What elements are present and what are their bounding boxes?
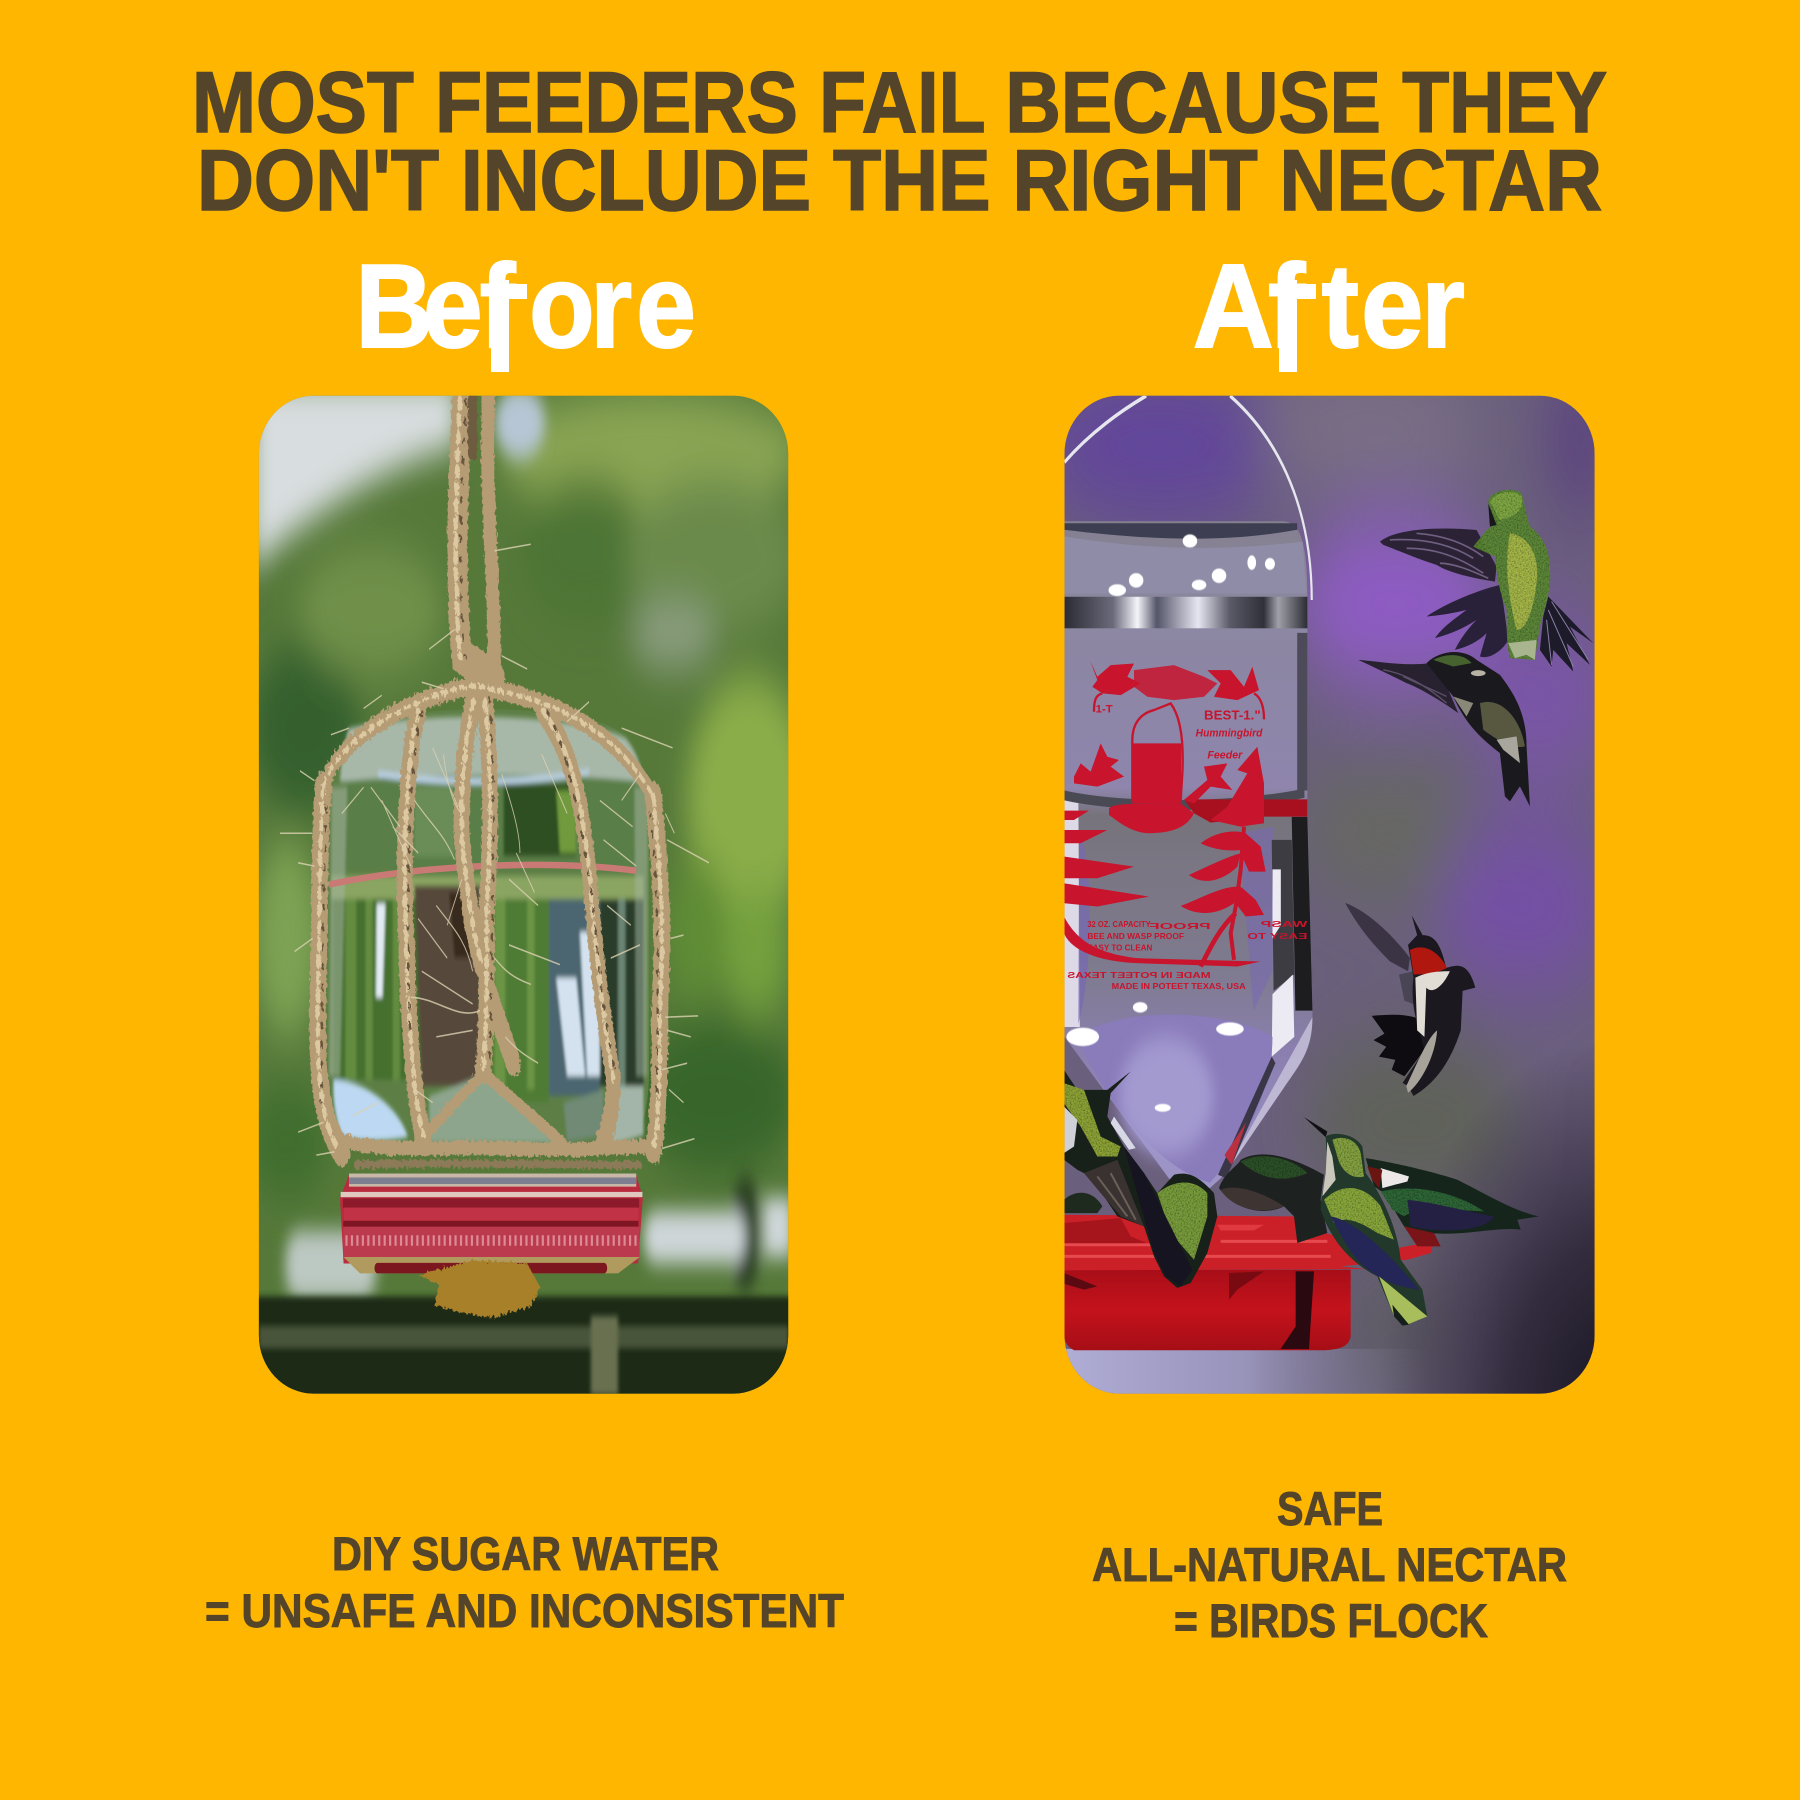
blurred garden background: [240, 380, 811, 1410]
metal band: [1065, 597, 1307, 628]
caption: before: DIY SUGAR WATER: [332, 1527, 719, 1580]
red feeder base: [1064, 1215, 1434, 1350]
hummingbird: top: [1358, 490, 1593, 806]
hummingbird: centre: [1219, 1154, 1327, 1243]
twine net: [318, 396, 662, 1165]
purple studio background: [1064, 396, 1595, 1394]
hummingbird: ruby throat: [1345, 903, 1475, 1096]
title: [192, 55, 1607, 229]
red printed logo: BEST-1.": [1204, 707, 1261, 722]
red printed logo: WASP: [1260, 919, 1307, 929]
glass jar: [327, 709, 649, 1156]
glass bottle: [1065, 521, 1312, 1188]
red printed logo: EASY TO: [1247, 931, 1307, 941]
caption: before: [205, 1527, 844, 1637]
hummingbird: second: [1358, 652, 1530, 806]
sponge wick: [418, 1260, 540, 1318]
hummingbird: rear right: [1366, 1158, 1539, 1246]
wire hanger: [1065, 396, 1312, 600]
photo: DIY jar feeder: [258, 396, 788, 1394]
twine fibres: [280, 544, 709, 1155]
red printed logo: MADE IN POTEET TEXAS: [1067, 970, 1211, 980]
hummingbirds at feeder: [1064, 1070, 1539, 1326]
heading: before: Before: [356, 240, 696, 372]
caption: after: [1092, 1482, 1567, 1647]
caption: after: ALL-NATURAL NECTAR: [1092, 1538, 1567, 1591]
hummingbird: left: [1064, 1070, 1217, 1288]
red printed logo: 1-T: [1096, 704, 1113, 716]
photo: hummingbird feeder: [1064, 396, 1595, 1394]
red printed logo: MADE IN POTEET TEXAS, USA: [1112, 981, 1246, 991]
red printed logo: Feeder: [1207, 749, 1243, 761]
red printed logo: Hummingbird: [1196, 728, 1263, 740]
red printed logo: BEE AND WASP PROOF: [1087, 931, 1184, 941]
red lid: [340, 1174, 643, 1273]
heading: after: After: [1193, 240, 1465, 373]
red printed logo: PROOF: [1149, 921, 1211, 931]
caption: after: SAFE: [1277, 1482, 1383, 1535]
hummingbird: front: [1304, 1117, 1427, 1326]
caption: before: = UNSAFE AND INCONSISTENT: [205, 1584, 844, 1637]
red printed logo: [1064, 660, 1307, 991]
title: DON'T INCLUDE THE RIGHT NECTAR: [197, 133, 1602, 229]
title: MOST FEEDERS FAIL BECAUSE THEY: [192, 55, 1607, 151]
red printed logo: EASY TO CLEAN: [1087, 943, 1152, 953]
red printed logo: 32 OZ. CAPACITY: [1087, 919, 1151, 929]
caption: after: = BIRDS FLOCK: [1174, 1594, 1488, 1647]
